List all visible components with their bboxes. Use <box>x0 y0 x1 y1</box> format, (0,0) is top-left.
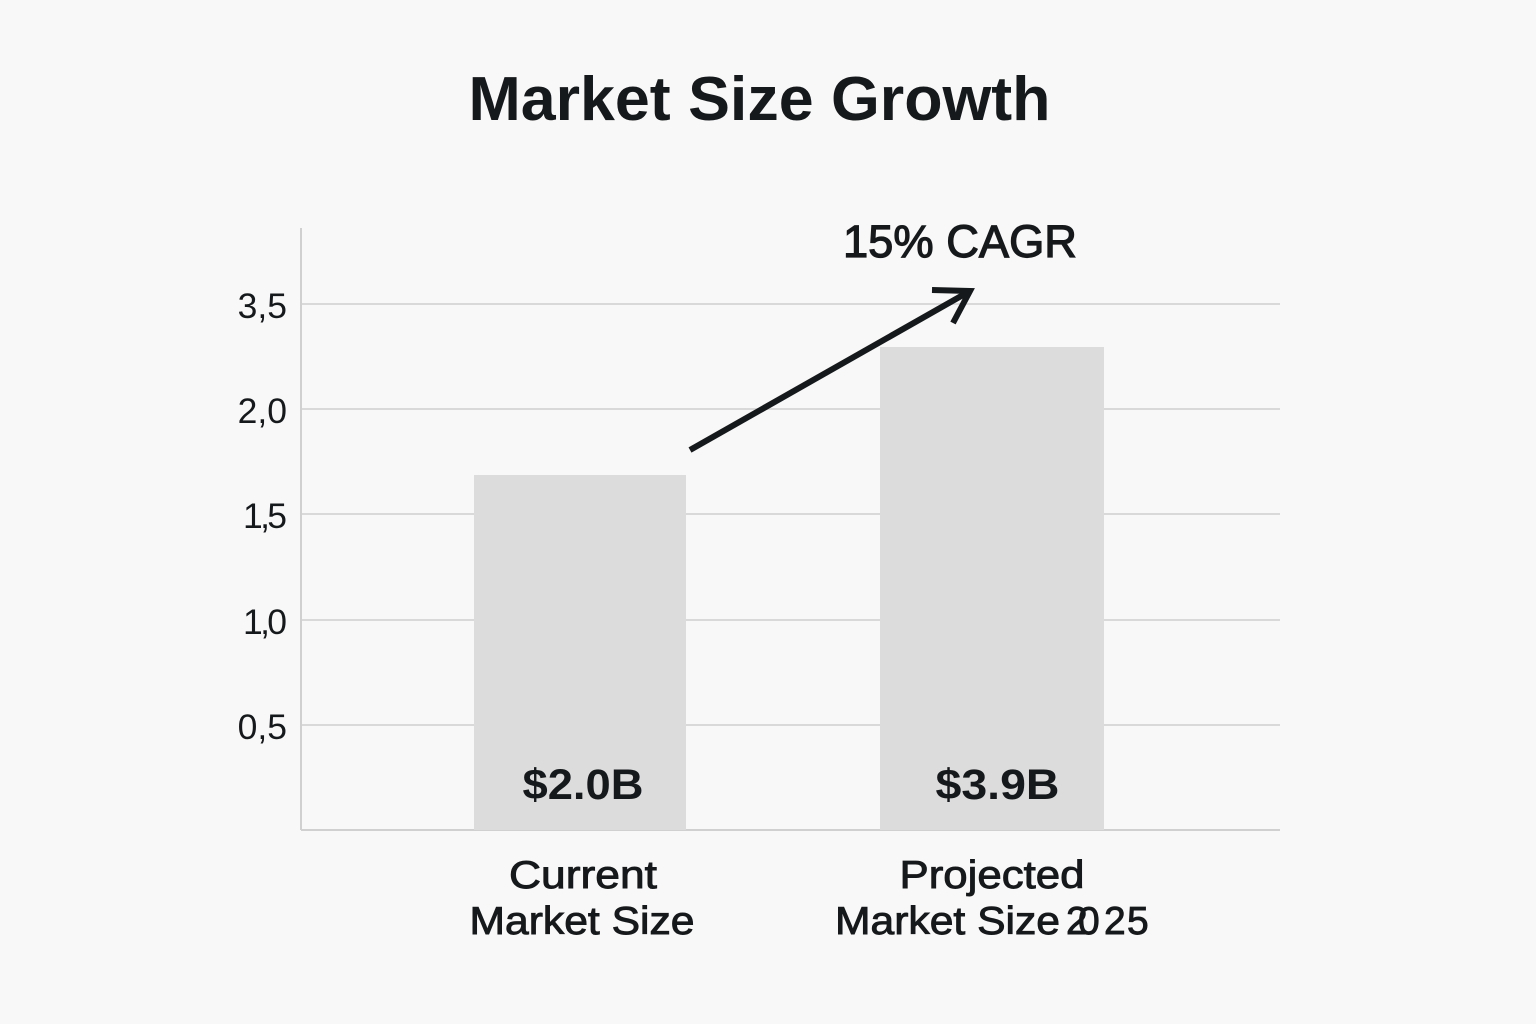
category label: projected: Market Size <box>835 900 1060 943</box>
category label: projected: 2025 <box>1066 900 1149 943</box>
y-axis labels: 0,5 <box>238 707 287 747</box>
value: projected: $3.9B <box>936 761 1060 809</box>
bar: current market size <box>474 475 686 830</box>
arrow: growth <box>690 290 970 450</box>
y-axis labels: 3,5 <box>238 286 287 326</box>
category label: projected <box>835 854 1149 943</box>
title: Market Size Growth <box>468 65 1050 134</box>
bar: projected market size <box>880 347 1104 830</box>
CAGR label: 15% CAGR <box>843 216 1077 267</box>
category label: current <box>470 854 694 943</box>
category label: projected: Projected <box>900 854 1084 897</box>
y-axis labels: 2,0 <box>238 391 287 431</box>
y-axis labels: 1,0 <box>243 602 287 642</box>
y-axis labels <box>238 286 287 747</box>
category label: current: Market Size <box>470 900 694 943</box>
y-axis labels: 1,5 <box>243 496 287 536</box>
value: current: $2.0B <box>522 761 644 809</box>
category label: current: Current <box>509 854 657 897</box>
